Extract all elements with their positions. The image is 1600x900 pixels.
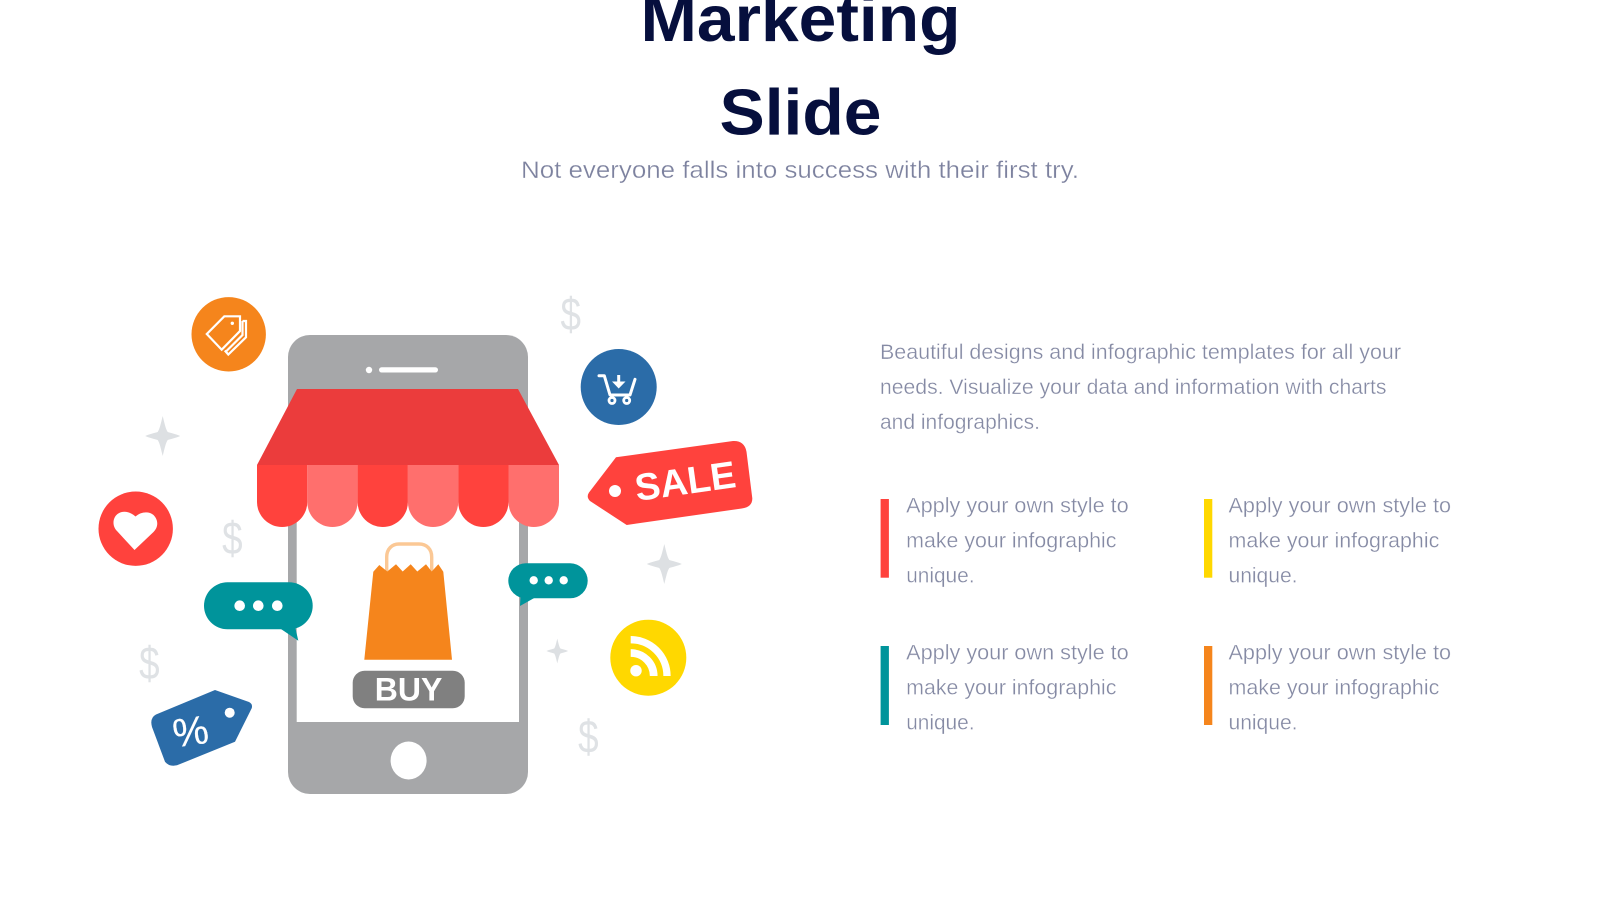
intro paragraph: Beautiful designs and infographic templates for all your xyxy=(880,341,1401,364)
speech bubble right xyxy=(508,563,588,606)
list item: yellow: make your infographic xyxy=(1228,530,1439,553)
title: Slide xyxy=(720,75,882,148)
list item: teal xyxy=(881,641,1129,734)
list item: teal: unique. xyxy=(906,711,974,734)
discount tag: % xyxy=(170,708,211,756)
icon: dollar sign lower left: $ xyxy=(139,637,160,689)
shopping bag xyxy=(364,544,452,660)
list item: teal: Apply your own style to xyxy=(906,641,1129,664)
icon: dollar sign left: $ xyxy=(222,512,243,564)
list item: orange: unique. xyxy=(1228,711,1298,734)
icon: price tags circle xyxy=(192,297,266,371)
list item: orange: Apply your own style to xyxy=(1228,641,1451,664)
list item: yellow: unique. xyxy=(1228,565,1298,588)
sale tag: SALE xyxy=(632,454,738,510)
phone xyxy=(288,335,528,794)
illustration: mobile shop xyxy=(98,288,752,794)
intro paragraph: and infographics. xyxy=(880,411,1040,434)
icon: dollar sign top: $ xyxy=(560,288,581,340)
subtitle: Not everyone falls into success with their first try. xyxy=(521,157,1079,184)
icon: heart circle xyxy=(98,492,173,566)
intro paragraph xyxy=(880,341,1401,434)
list item: yellow xyxy=(1204,495,1451,588)
list item: yellow: Apply your own style to xyxy=(1228,495,1451,518)
list item: teal: make your infographic xyxy=(906,676,1116,699)
list item: red: Apply your own style to xyxy=(906,495,1129,518)
phone speaker xyxy=(366,367,438,373)
icon: dollar sign lower right: $ xyxy=(578,711,599,763)
buy button xyxy=(353,671,465,708)
list item: red: unique. xyxy=(906,565,974,588)
phone home button xyxy=(391,742,427,780)
discount tag xyxy=(151,690,252,766)
buy button: BUY xyxy=(375,672,442,708)
list item: orange: make your infographic xyxy=(1228,676,1439,699)
icon: sparkle small xyxy=(546,639,568,663)
icon: sparkle right xyxy=(647,544,682,584)
speech bubble left xyxy=(204,582,313,641)
shop awning xyxy=(257,389,559,527)
sale tag xyxy=(588,441,752,525)
list item: red xyxy=(881,495,1129,588)
icon: cart circle xyxy=(581,349,657,425)
icon: sparkle left xyxy=(145,416,180,456)
icon: rss circle xyxy=(610,620,686,696)
title xyxy=(640,0,960,148)
intro paragraph: needs. Visualize your data and information with charts xyxy=(880,376,1386,399)
list item: orange xyxy=(1204,641,1451,734)
phone screen xyxy=(297,395,519,722)
list item: red: make your infographic xyxy=(906,530,1116,553)
